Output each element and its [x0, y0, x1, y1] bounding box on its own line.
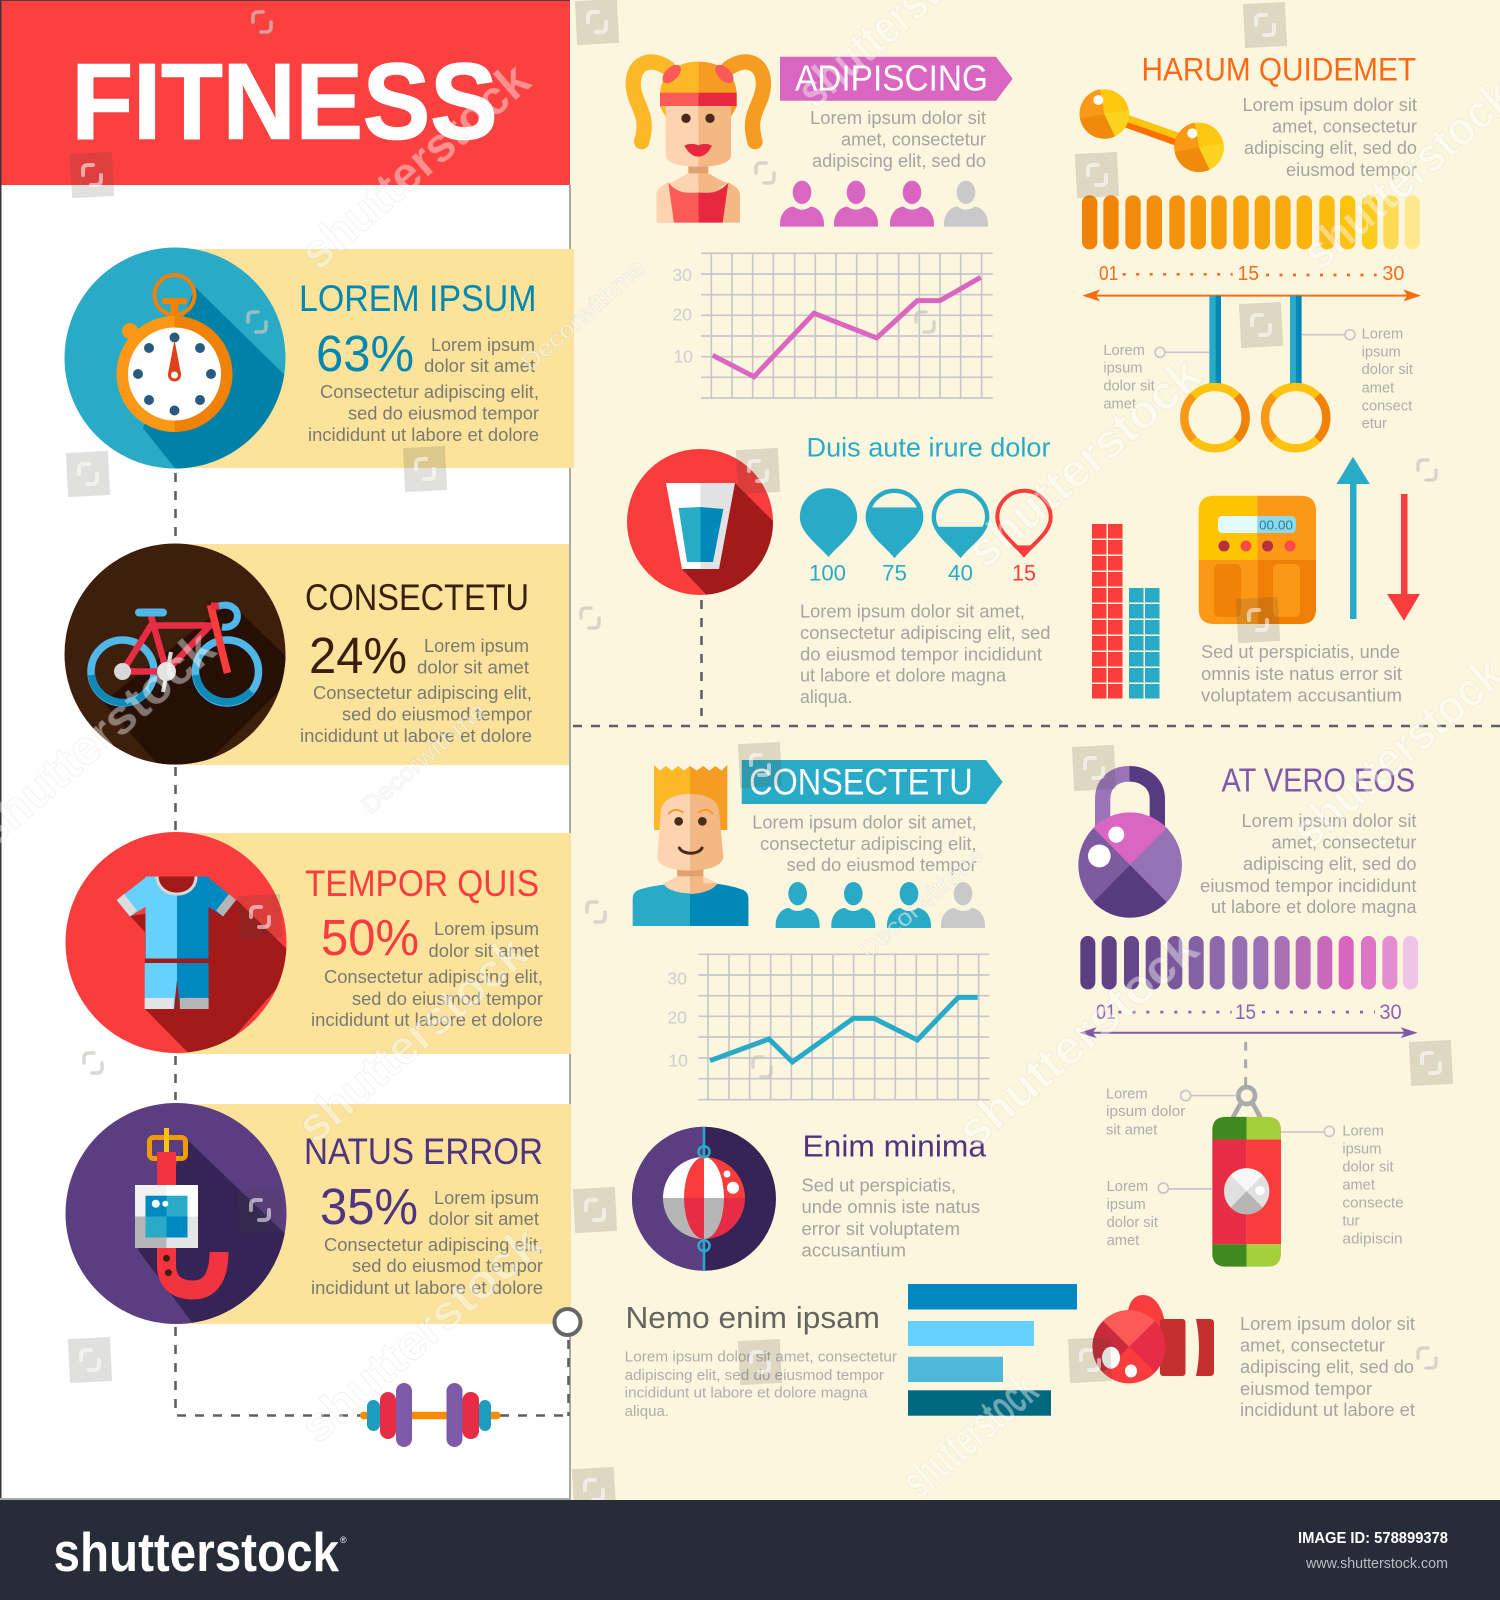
text: enim body: accusantium [802, 1241, 906, 1261]
scale: orange bars, axis and rings [1080, 89, 1421, 448]
text: at vero body: ut labore et dolore magna [1211, 897, 1417, 917]
callout: left ring: ipsum [1103, 361, 1142, 377]
logo mark: ® [340, 1535, 347, 1545]
connector end ring [554, 1309, 580, 1335]
tag: consectetu: CONSECTETU [749, 761, 973, 802]
text: adipiscing body: adipiscing elit, sed do [812, 151, 986, 171]
text: at vero body: Lorem ipsum dolor sit [1242, 811, 1416, 831]
text block: Consectetur adipiscing elit, [324, 967, 543, 987]
panel: natus error [66, 1103, 571, 1340]
text: nemo body: incididunt ut labore et dolore magna [625, 1386, 868, 1402]
callout: right ring: Lorem [1362, 326, 1403, 342]
heading: harum quidemet: HARUM QUIDEMET [1142, 52, 1416, 88]
heading: duis aute: Duis aute irure dolor [806, 433, 1051, 463]
axis labels: 01 15 30: 01 [1099, 262, 1118, 285]
callout: bag right: tur [1342, 1213, 1360, 1229]
footer bar [0, 1500, 1500, 1600]
icon: punching bag [1212, 1042, 1281, 1267]
text: enim body: Sed ut perspiciatis, [802, 1176, 956, 1196]
icon row: people, pink [780, 181, 988, 227]
icon: bathroom scale: 00.00 [1259, 518, 1293, 532]
icon: gymnastic rings [1184, 296, 1326, 448]
watermark overlay: shutterstock [957, 348, 1211, 578]
heading: nemo enim ipsam: Nemo enim ipsam [626, 1300, 880, 1335]
text: nemo body: aliqua. [625, 1404, 669, 1420]
logo: shutterstock: shutterstock [54, 1521, 339, 1583]
heading: consectetu: CONSECTETU [305, 577, 529, 618]
icon: stopwatch [64, 248, 286, 468]
line chart: adipiscing: 30 [672, 265, 692, 285]
text: duis body: ut labore et dolore magna [800, 666, 1007, 686]
text block: dolor sit amet [417, 658, 529, 678]
icon: belt [66, 1103, 286, 1324]
title banner [0, 0, 570, 185]
callout: bag right: dolor sit [1342, 1159, 1394, 1175]
text block: Lorem ipsum [434, 1188, 539, 1208]
text block: incididunt ut labore et dolore [311, 1278, 543, 1298]
title: FITNESS: FITNESS [72, 40, 498, 162]
watermark overlay: Decorwithme [854, 842, 989, 965]
line chart: consectetu: 30 [667, 968, 687, 988]
callout: bag right: consecte [1342, 1195, 1404, 1211]
image id: IMAGE ID: 578899378 [1298, 1530, 1448, 1547]
callout: left ring [1103, 343, 1209, 412]
callout: bag left [1107, 1179, 1212, 1249]
pin values: 100 [809, 561, 846, 586]
text block: Lorem ipsum [431, 335, 535, 355]
text block [311, 1188, 543, 1298]
text: duis body: Lorem ipsum dolor sit amet, [800, 602, 1025, 622]
text: glove body: adipiscing elit, sed do [1240, 1357, 1414, 1377]
axis labels: 01 15 30: 15 [1238, 262, 1259, 285]
arrow: orange range [1082, 289, 1421, 301]
connector: dashed timeline [176, 473, 569, 1416]
text block: dolor sit amet [428, 1209, 539, 1229]
callout: bag right [1281, 1123, 1404, 1248]
text block: dolor sit amet [428, 941, 539, 961]
callout: bag top: Lorem [1106, 1086, 1148, 1102]
callout: bag right: amet [1342, 1177, 1375, 1194]
heading: at vero eos: AT VERO EOS [1222, 762, 1415, 799]
callout: bag top [1106, 1086, 1237, 1138]
heading: enim minima: Enim minima [802, 1129, 987, 1164]
text block: incididunt ut labore et dolore [308, 425, 539, 445]
panel: consectetu [64, 544, 569, 765]
divider: section dashes [573, 600, 1500, 726]
text: nemo body [625, 1350, 897, 1420]
callout: bag left: ipsum [1107, 1197, 1146, 1213]
text: harum body [1242, 95, 1417, 180]
text: scale body [1201, 642, 1402, 706]
text: harum body: Lorem ipsum dolor sit [1242, 95, 1417, 115]
watermark overlay: shutterstock [290, 1216, 552, 1453]
text: consectetu body: Lorem ipsum dolor sit amet, [752, 812, 977, 832]
text block: sed do eiusmod tempor [352, 1256, 543, 1276]
text block [311, 919, 543, 1030]
teal stack [1129, 588, 1160, 698]
callout: right ring: amet [1362, 380, 1394, 396]
arrow: up [1336, 457, 1370, 619]
line chart: consectetu: 20 [667, 1008, 687, 1028]
panel: lorem ipsum [64, 248, 574, 468]
text: adipiscing body: amet, consectetur [841, 130, 986, 150]
panel: tempor quis [66, 832, 571, 1070]
text: duis body: consectetur adipiscing elit, sed [800, 623, 1050, 643]
callout: right ring: ipsum [1362, 344, 1401, 360]
pin values: 75 [882, 561, 907, 586]
pin values [809, 561, 1036, 586]
callout: bag right: adipiscin [1342, 1232, 1403, 1248]
axis labels: 01 15 30: 30 [1382, 262, 1404, 285]
text: at vero body: eiusmod tempor incididunt [1200, 876, 1416, 896]
heading: natus error: NATUS ERROR [304, 1131, 543, 1172]
line chart: adipiscing: 20 [672, 305, 692, 325]
callout: right ring: consect [1362, 398, 1412, 414]
text: scale body: voluptatem accusantium [1201, 686, 1402, 706]
text block: Lorem ipsum [424, 636, 529, 656]
stat: 50%: 50% [321, 909, 419, 966]
text: at vero body [1200, 811, 1417, 917]
text: consectetu body [752, 812, 977, 875]
callout: bag right: ipsum [1342, 1141, 1381, 1157]
arrow: down [1387, 494, 1420, 621]
pins: level gauges [800, 488, 1052, 586]
text block: Consectetur adipiscing elit, [313, 683, 532, 703]
watermark overlay: shutterstock [287, 926, 538, 1153]
site url: www.shutterstock.com [1305, 1556, 1448, 1572]
text block: Lorem ipsum [434, 919, 539, 939]
stat: 35%: 35% [320, 1178, 418, 1235]
callout: bag top: ipsum dolor [1106, 1104, 1185, 1120]
pin values: 40 [948, 561, 973, 586]
heading: lorem ipsum: LOREM IPSUM [299, 278, 536, 319]
callout: bag top: sit amet [1106, 1122, 1157, 1138]
line chart: adipiscing [672, 253, 993, 398]
text: harum body: adipiscing elit, sed do [1244, 138, 1417, 158]
text: adipiscing body [810, 108, 986, 171]
bar chart: horizontal [908, 1284, 1077, 1416]
axis labels: 01 15 30: 15 [1235, 1001, 1256, 1024]
text: glove body: incididunt ut labore et [1240, 1400, 1415, 1420]
avatar: boy [633, 765, 748, 926]
text: scale body: Sed ut perspiciatis, unde [1201, 642, 1400, 662]
text: glove body: eiusmod tempor [1240, 1379, 1372, 1399]
text block [300, 636, 532, 746]
line chart: consectetu [667, 954, 989, 1100]
axis labels: 01 15 30: 01 [1096, 1001, 1116, 1024]
arrow: purple range [1079, 1027, 1418, 1038]
icon: orange dumbbell [1080, 89, 1224, 172]
watermark overlay: Decorwithme [356, 697, 491, 820]
icon: speed bag [632, 1127, 776, 1271]
text: harum body: amet, consectetur [1272, 117, 1417, 137]
axis labels: 01 15 30 [1099, 262, 1404, 285]
text block: Consectetur adipiscing elit, [324, 1235, 543, 1255]
callout: left ring: Lorem [1103, 343, 1145, 359]
stacked bars: red and teal [1092, 524, 1160, 698]
text: at vero body: amet, consectetur [1272, 832, 1416, 852]
line chart: adipiscing: 10 [673, 347, 693, 367]
text block: sed do eiusmod tempor [342, 704, 532, 724]
tag: adipiscing: ADIPISCING [795, 58, 988, 98]
icon: sports kit [66, 832, 286, 1053]
icon: bicycle [64, 544, 286, 764]
text block: incididunt ut labore et dolore [311, 1010, 543, 1030]
red stack [1092, 524, 1122, 698]
pin values: 15 [1012, 561, 1036, 586]
axis labels: 01 15 30: 30 [1379, 1001, 1402, 1024]
text: enim body: unde omnis iste natus [802, 1197, 980, 1217]
callout: bag right: Lorem [1342, 1123, 1384, 1139]
callout: bag left: dolor sit [1107, 1215, 1158, 1231]
text: glove body: amet, consectetur [1240, 1336, 1385, 1356]
bars: orange gradient [1082, 195, 1420, 249]
text: duis body: aliqua. [800, 687, 852, 707]
callout: right ring: dolor sit [1362, 362, 1413, 378]
text block: incididunt ut labore et dolore [300, 726, 532, 746]
text: at vero body: adipiscing elit, sed do [1243, 854, 1416, 874]
text: enim body [802, 1176, 980, 1261]
callout: left ring: amet [1103, 396, 1136, 412]
avatar: girl [633, 62, 763, 223]
axis labels: 01 15 30 [1096, 1001, 1402, 1024]
text: glove body: Lorem ipsum dolor sit [1240, 1314, 1415, 1334]
text: nemo body: adipiscing elit, sed do eiusmod tempor [625, 1368, 884, 1384]
text: consectetu body: sed do eiusmod tempor [787, 855, 977, 875]
text: adipiscing body: Lorem ipsum dolor sit [810, 108, 986, 128]
callout: left ring: dolor sit [1103, 379, 1155, 395]
line chart: consectetu: 10 [668, 1050, 688, 1070]
text block: sed do eiusmod tempor [348, 404, 539, 424]
icon row: people, teal [776, 882, 985, 928]
watermark overlay: shutterstock [892, 1363, 1048, 1508]
callout: bag left: amet [1107, 1233, 1139, 1249]
text block: Consectetur adipiscing elit, [320, 382, 539, 402]
scale: purple bars, axis and punching bag [1078, 774, 1418, 1267]
callout: bag left: Lorem [1107, 1179, 1148, 1195]
stat: 24%: 24% [309, 627, 407, 684]
text: nemo body: Lorem ipsum dolor sit amet, consectetur [625, 1350, 897, 1366]
text block [308, 335, 539, 445]
text: enim body: error sit voluptatem [802, 1219, 960, 1239]
icon: boxing glove [1092, 1295, 1214, 1383]
callout: right ring [1302, 326, 1413, 432]
text: glove body [1240, 1314, 1415, 1420]
text: harum body: eiusmod tempor [1286, 160, 1417, 180]
text: duis body [800, 602, 1050, 707]
text: scale body: omnis iste natus error sit [1201, 664, 1402, 684]
heading: tempor quis: TEMPOR QUIS [305, 863, 539, 904]
text block: sed do eiusmod tempor [352, 989, 543, 1009]
bars: purple gradient [1080, 936, 1418, 989]
watermark overlay: shutterstock [947, 921, 1209, 1158]
watermark overlay: Decorwithme [516, 254, 651, 377]
icon: kettlebell [1078, 774, 1182, 918]
stat: 63%: 63% [316, 325, 414, 382]
icon: bathroom scale [1199, 496, 1316, 624]
text: consectetu body: consectetur adipiscing elit, [760, 834, 977, 854]
icon: glass of water [627, 449, 773, 595]
callout: right ring: etur [1362, 416, 1387, 432]
watermark overlay: shutterstock [290, 53, 541, 280]
text block: dolor sit amet [424, 356, 535, 376]
icon: barbell [360, 1383, 500, 1447]
text: duis body: do eiusmod tempor incididunt [800, 645, 1042, 665]
